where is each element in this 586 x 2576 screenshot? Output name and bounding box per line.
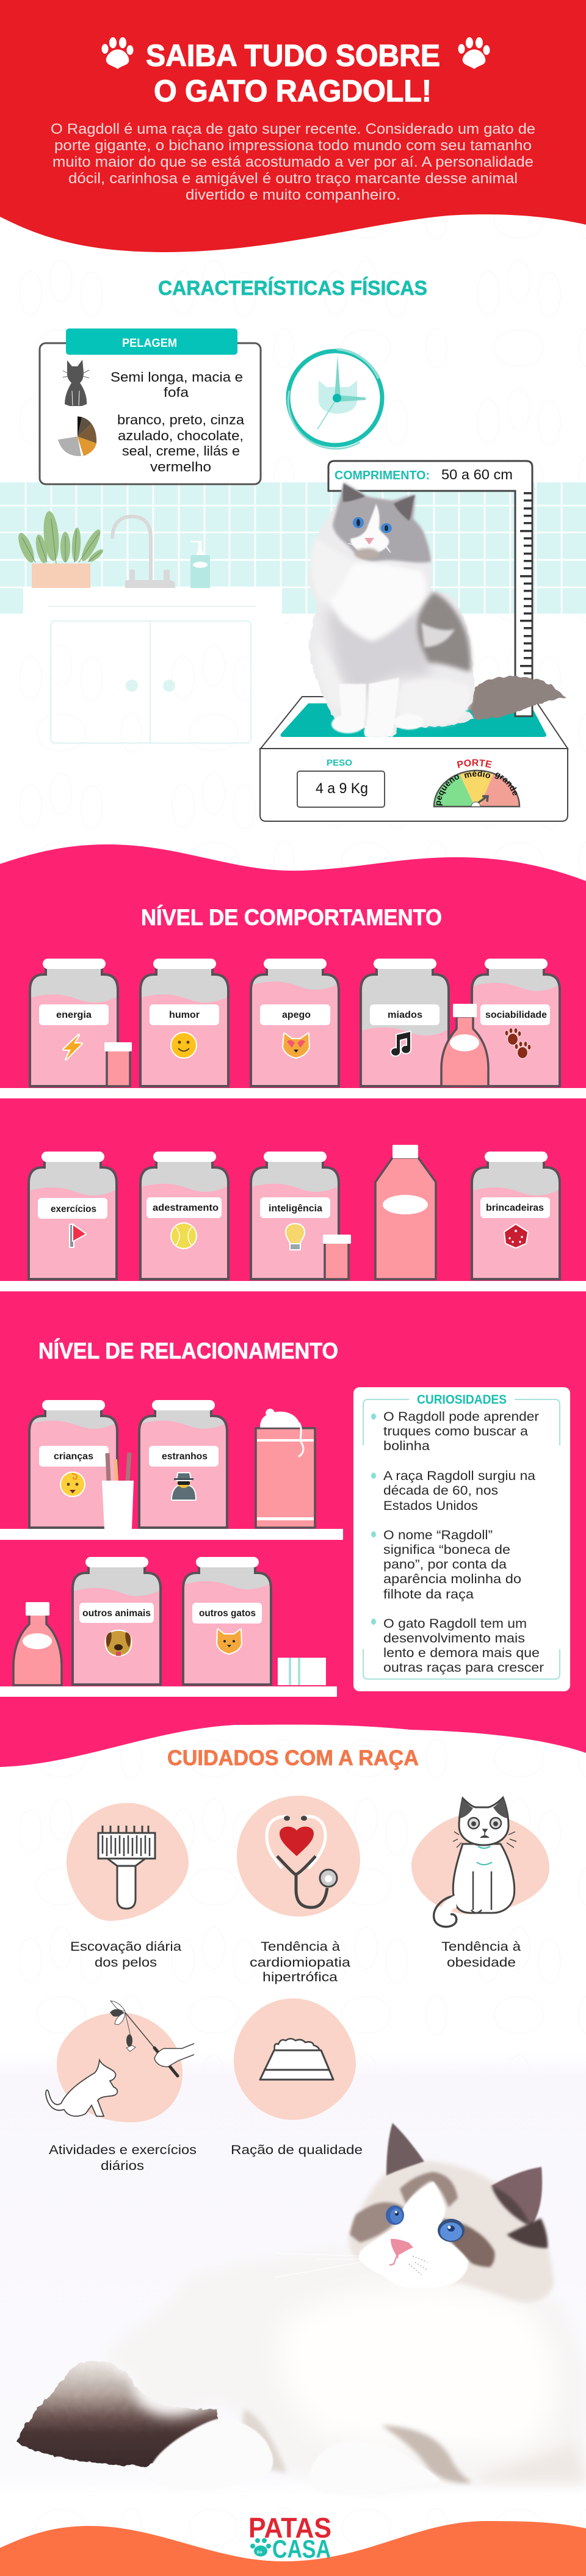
body [104,2247,586,2493]
jar: estranhos: estranhos [162,1451,208,1462]
colours description: seal, creme, lilás e [122,443,240,459]
intro text: O Ragdoll é uma raça de gato super recente. Considerado um gato de [51,121,535,137]
title: SAIBA TUDO SOBRE [146,38,440,73]
caption [49,2142,197,2173]
cat chest [320,562,427,641]
jar: outros animais: outros animais [82,1608,151,1619]
peso: 4 a 9 Kg [316,780,368,797]
icon: brush [98,1826,155,1909]
curiosidades text: bolinha [383,1439,430,1453]
curiosidades text: truques como buscar a [383,1424,528,1439]
curiosidades text: filhote da raça [383,1587,474,1602]
jar: sociabilidade: sociabilidade [485,1010,547,1020]
shelf 2 [0,1281,586,1291]
intro text: muito maior do que se está acostumado a ver por aí. A personalidade [52,154,534,170]
jar: exercícios [27,1152,118,1280]
footer wave [0,2521,586,2576]
care: cardiomiopatia [237,1796,360,1984]
porte gauge [433,760,520,807]
dark side [507,2218,548,2248]
care: escovação [67,1803,189,1970]
curiosidades text: O Ragdoll pode aprender [383,1409,539,1424]
left ear [386,2123,424,2175]
heading: cuidados com a raça: CUIDADOS COM A RAÇA [167,1746,419,1770]
folded towels [278,1658,326,1685]
jar: inteligência [250,1152,340,1280]
care: obesidade [411,1798,549,1970]
photo: ragdoll cat on scale [309,482,566,738]
pie chart: coat colours [58,416,96,456]
jar: energia [29,959,119,1087]
icon: white cat [434,1798,516,1927]
panel: curiosidades [353,1387,570,1691]
bathroom background [0,482,586,743]
cup with sticks [102,1453,134,1529]
right ear [491,2167,542,2227]
caption: Escovação diária [70,1939,181,1954]
photo backdrop [0,2053,586,2495]
mouse [260,1409,303,1457]
jar: outros gatos [182,1557,272,1686]
whiskers [275,2253,363,2277]
heading: características físicas: CARACTERÍSTICAS FÍSICAS [158,277,427,299]
title: O GATO RAGDOLL! [154,74,432,108]
section: nível de comportamento [0,844,586,1767]
eyes [386,2205,404,2225]
jar: adestramento [139,1152,230,1280]
logo: patas da casa [248,2512,331,2563]
icon: playing cat [46,2060,117,2116]
porte gauge: grande [494,772,517,796]
cat face [333,482,431,562]
jar: brincadeiras: brincadeiras [486,1203,544,1213]
jar: miados [360,959,450,1087]
caption: Atividades e exercícios [49,2142,197,2157]
caption: Ração de qualidade [231,2142,363,2157]
icon: stethoscope [267,1816,337,1907]
intro text: porte gigante, o bichano impressiona todo mundo com seu tamanho [54,137,532,154]
logo paw [250,2538,271,2556]
caption: dos pelos [95,1955,157,1970]
header panel [0,0,586,252]
coat description: Semi longa, macia e [110,369,243,385]
porte gauge: PORTE [457,760,492,768]
left mask [350,2202,405,2243]
jar: outros animais [71,1557,162,1686]
jar: sociabilidade [471,959,561,1087]
icon: wand with feather [110,2001,178,2076]
caption: cardiomiopatia [250,1955,350,1970]
towel box with mouse [256,1409,315,1528]
curiosidades text [383,1409,544,1675]
icon: hand [154,2044,194,2067]
bottle with oval label [441,1004,488,1086]
jar: crianças [28,1400,118,1529]
cat grey flank [418,592,471,672]
paws [148,2418,440,2495]
caption: diários [101,2158,144,2173]
caption: Tendência à [441,1939,521,1954]
soap bottle [190,541,210,588]
right mask [438,2218,495,2267]
photo: ragdoll cat lying [17,2123,586,2495]
jar: inteligência: inteligência [269,1203,322,1214]
curiosidades text: lento e demora mais que [383,1645,540,1660]
big bottle [375,1145,436,1279]
pelagem header: PELAGEM [122,337,177,350]
section: nível de relacionamento [0,1338,570,1735]
intro text: dócil, carinhosa e amigável é outro traço marcante desse animal [68,170,518,187]
small bottle [323,1235,351,1279]
cabinet [51,621,251,743]
curiosidades heading: CURIOSIDADES [417,1393,507,1407]
caption: obesidade [447,1955,516,1970]
small bottle [104,1042,132,1086]
curiosidades text: Estados Unidos [383,1498,478,1513]
care: ração [231,1998,363,2157]
jar: adestramento: adestramento [153,1203,219,1213]
caption: Tendência à [261,1939,340,1954]
cat body silhouette [309,482,474,737]
panel: pelagem [40,328,261,484]
coat description: fofa [164,385,189,400]
jar: humor: humor [169,1010,200,1020]
colours description: branco, preto, cinza [117,412,245,427]
intro text [51,121,535,203]
cat left side [317,641,348,708]
caption: hipertrófica [262,1970,338,1984]
shelf 3 [0,1529,343,1540]
peso: PESO [327,758,352,768]
jar: energia: energia [56,1010,92,1020]
peso [297,758,385,807]
body highlight [280,2287,555,2450]
colours description [117,412,245,474]
head [275,2123,554,2302]
curiosidades text: O nome “Ragdoll” [383,1528,493,1542]
counter line [48,606,256,607]
nose [391,2239,413,2259]
colours description: vermelho [150,459,211,474]
logo: patas da casa: PATAS [248,2512,331,2544]
heading: NÍVEL DE COMPORTAMENTO [141,905,442,930]
curiosidades text: década de 60, nos [383,1483,498,1498]
scale [259,696,569,822]
curiosidades text: outras raças para crescer [383,1660,544,1675]
body shading [241,2409,287,2473]
curiosidades text: significa “boneca de [383,1542,510,1557]
jar: crianças: crianças [54,1451,93,1462]
icon: left paw [101,37,133,69]
jar: estranhos [138,1400,228,1529]
jar: miados: miados [388,1010,422,1020]
comprimento label: 50 a 60 cm [441,466,513,482]
curiosidades text: A raça Ragdoll surgiu na [383,1468,535,1483]
caption [70,1939,181,1970]
colours description: azulado, chocolate, [118,428,244,443]
jar: humor [139,959,230,1087]
cat tail [468,677,566,719]
pelagem header [66,328,237,355]
porte gauge: pequeno [436,775,459,806]
clock [288,349,382,449]
comprimento label [335,466,513,482]
cat lower grey [327,611,430,702]
bottle with oval label [13,1602,62,1685]
tail [17,2361,219,2467]
porte gauge: médio [464,770,490,778]
white face [358,2182,468,2288]
jar: apego [250,959,340,1087]
logo: patas da casa: CASA [272,2534,331,2563]
icon: cat silhouette [63,360,89,406]
forehead band [400,2172,458,2207]
care: atividades [46,2001,197,2173]
caption [441,1939,521,1970]
curiosidades text: aparência molinha do [383,1572,521,1586]
curiosidades text: desenvolvimento mais [383,1631,525,1645]
jar: brincadeiras [471,1152,561,1280]
heading: NÍVEL DE RELACIONAMENTO [38,1338,338,1363]
intro text: divertido e muito companheiro. [186,187,400,203]
jar: exercícios: exercícios [51,1204,96,1214]
coat description [110,369,243,400]
logo: patas da casa: DA [257,2551,262,2555]
ruler ticks [520,492,532,681]
cat haunch white [398,678,471,725]
shelf 1 [0,1088,586,1098]
shelf 4 [0,1686,337,1697]
title [146,38,440,108]
cat legs and paws [331,678,424,738]
icon: bowl [260,2039,333,2080]
curiosidades text: O gato Ragdoll tem um [383,1616,527,1631]
curiosidades text: pano”, por conta da [383,1557,507,1572]
caption [250,1939,350,1984]
comprimento label: COMPRIMENTO: [335,469,430,482]
bullets [371,1413,376,1625]
plant [15,510,105,588]
jar: apego: apego [282,1010,311,1020]
ruler: comprimento [328,461,532,716]
icon: right paw [458,37,490,69]
jar: outros gatos: outros gatos [199,1608,256,1619]
faucet [112,517,175,588]
